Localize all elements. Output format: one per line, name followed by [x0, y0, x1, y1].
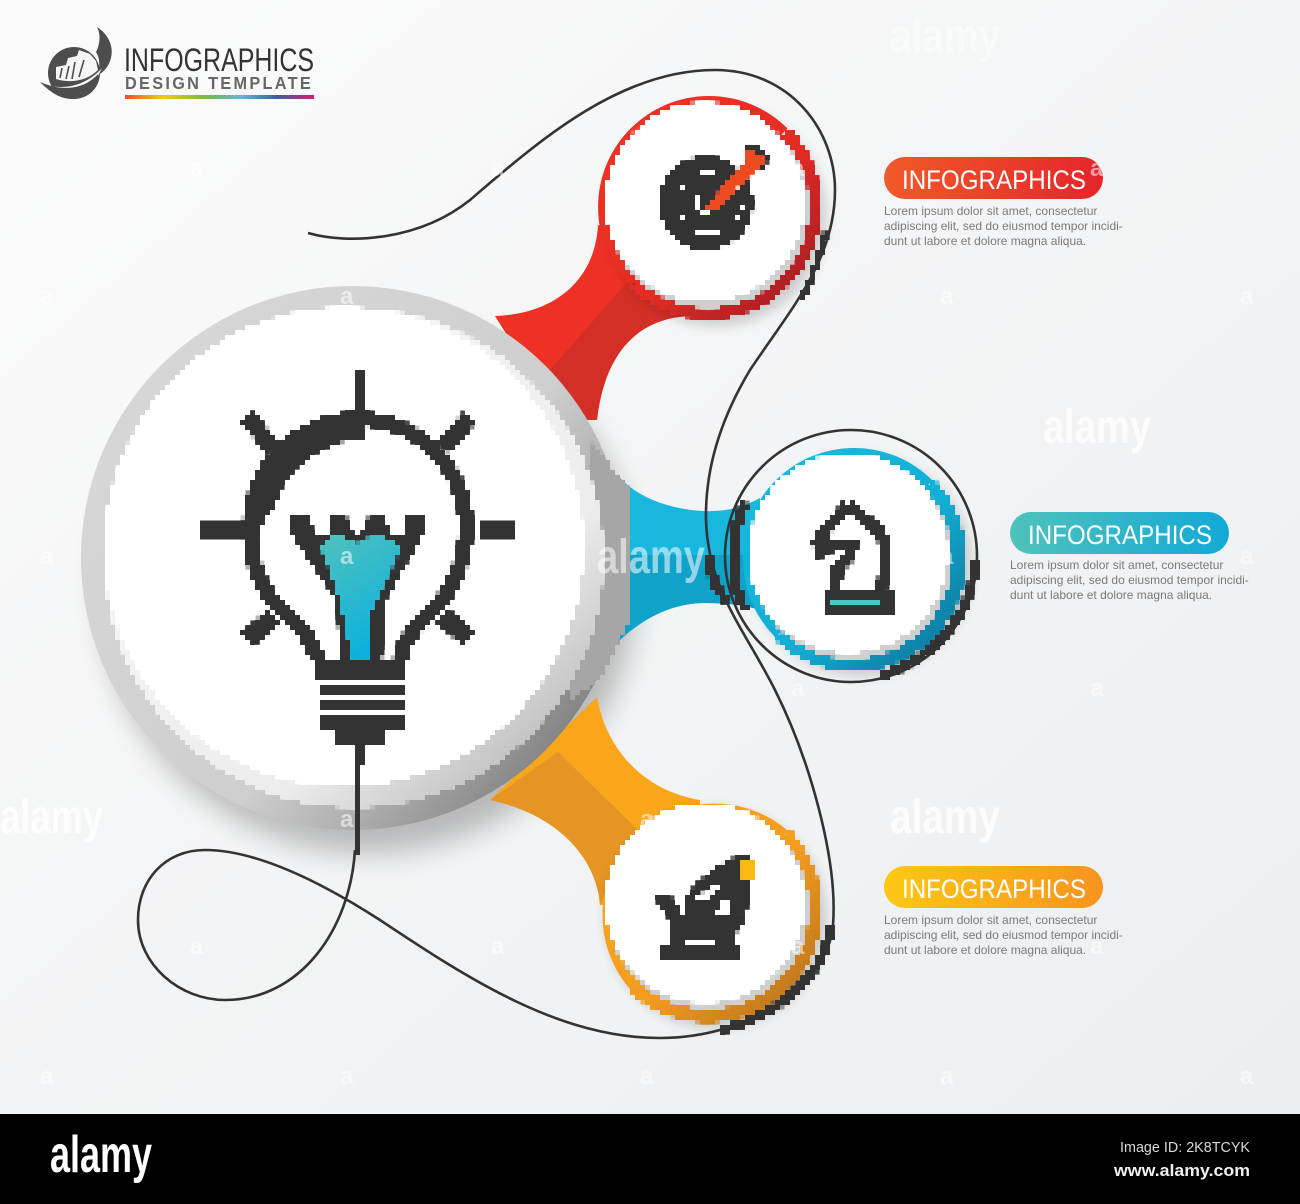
image id: Image ID: 2K8TCYK — [1120, 1139, 1250, 1156]
description: Lorem ipsum dolor sit amet, consectetur — [1010, 558, 1223, 572]
node shadow — [606, 106, 826, 326]
watermarks: alamy — [0, 791, 103, 844]
watermarks: a — [491, 675, 505, 702]
bulb pixels — [198, 370, 517, 853]
white disc — [605, 803, 809, 1009]
watermarks: a — [1090, 155, 1104, 182]
website: www.alamy.com — [1113, 1161, 1250, 1180]
watermarks: a — [40, 1063, 54, 1090]
coloured disc — [598, 96, 821, 319]
icon: chess knight — [815, 505, 893, 616]
watermarks: alamy — [1043, 401, 1151, 454]
watermarks: alamy — [597, 531, 705, 584]
watermarks: a — [1240, 283, 1254, 310]
description: dunt ut labore et dolore magna aliqua. — [884, 234, 1086, 248]
watermarks: a — [1090, 933, 1104, 960]
watermarks: a — [40, 543, 54, 570]
coloured disc — [603, 804, 822, 1023]
description: Lorem ipsum dolor sit amet, consectetur — [884, 913, 1097, 927]
watermarks: a — [190, 675, 204, 702]
icon: telescope — [655, 853, 754, 958]
description: adipiscing elit, sed do eiusmod tempor incidi- — [1010, 573, 1249, 587]
connector: blue — [620, 478, 760, 640]
description: dunt ut labore et dolore magna aliqua. — [1010, 588, 1212, 602]
watermarks: alamy — [890, 10, 1000, 63]
watermarks: a — [491, 933, 505, 960]
description: Lorem ipsum dolor sit amet, consectetur — [884, 204, 1097, 218]
watermarks: alamy — [890, 791, 1000, 844]
pill — [884, 157, 1103, 199]
big circle soft shadow — [100, 317, 636, 853]
inner bevel — [104, 308, 604, 808]
ring right edge — [570, 440, 628, 700]
outer ring — [81, 286, 625, 830]
coloured disc — [743, 448, 966, 671]
logo mark — [36, 27, 112, 99]
watermarks: a — [791, 675, 805, 702]
watermarks: a — [491, 155, 505, 182]
watermarks: a — [1240, 543, 1254, 570]
footer bar — [0, 1114, 1300, 1204]
connecting line — [138, 70, 835, 1038]
pill — [1010, 512, 1229, 554]
watermarks: a — [340, 806, 354, 833]
description: adipiscing elit, sed do eiusmod tempor incidi- — [884, 928, 1123, 942]
step 2 label: blue — [1010, 512, 1249, 602]
connector: orange — [490, 697, 700, 905]
pill — [884, 866, 1103, 908]
description: dunt ut labore et dolore magna aliqua. — [884, 943, 1086, 957]
footer logo: alamy — [50, 1126, 152, 1184]
pixelated line segments — [708, 232, 975, 1030]
red node — [598, 96, 826, 326]
watermarks: a — [791, 933, 805, 960]
connector: red — [495, 225, 690, 420]
main hub circle — [81, 286, 628, 830]
watermarks: a — [340, 543, 354, 570]
watermarks: a — [190, 155, 204, 182]
logo — [36, 27, 314, 99]
node shadow — [752, 456, 972, 676]
white disc — [605, 102, 809, 308]
orange node — [603, 803, 826, 1028]
white disc — [748, 453, 952, 659]
logo title: INFOGRAPHICS — [124, 42, 314, 78]
white disc — [104, 307, 584, 787]
watermarks: a — [340, 283, 354, 310]
rainbow bar — [125, 95, 314, 99]
watermarks: a — [940, 283, 954, 310]
watermarks: a — [640, 806, 654, 833]
icon: target with arrow — [659, 143, 770, 250]
watermarks: a — [640, 1063, 654, 1090]
watermarks: a — [190, 933, 204, 960]
blue node — [743, 448, 972, 676]
watermarks: a — [40, 283, 54, 310]
watermarks: a — [1240, 1063, 1254, 1090]
watermarks: a — [940, 1063, 954, 1090]
logo subtitle: DESIGN TEMPLATE — [125, 73, 313, 93]
pill text: INFOGRAPHICS — [902, 165, 1086, 195]
description: adipiscing elit, sed do eiusmod tempor incidi- — [884, 219, 1123, 233]
watermarks: a — [340, 1063, 354, 1090]
pill text: INFOGRAPHICS — [902, 874, 1086, 904]
step 3 label: orange — [884, 866, 1123, 957]
pill text: INFOGRAPHICS — [1028, 520, 1212, 550]
watermarks: a — [1090, 675, 1104, 702]
central light bulb icon — [198, 370, 517, 853]
watermarks: a — [791, 155, 805, 182]
step 1 label: red — [884, 157, 1123, 248]
node shadow — [606, 808, 826, 1028]
ring line around blue node — [725, 430, 977, 682]
watermarks: a — [940, 543, 954, 570]
